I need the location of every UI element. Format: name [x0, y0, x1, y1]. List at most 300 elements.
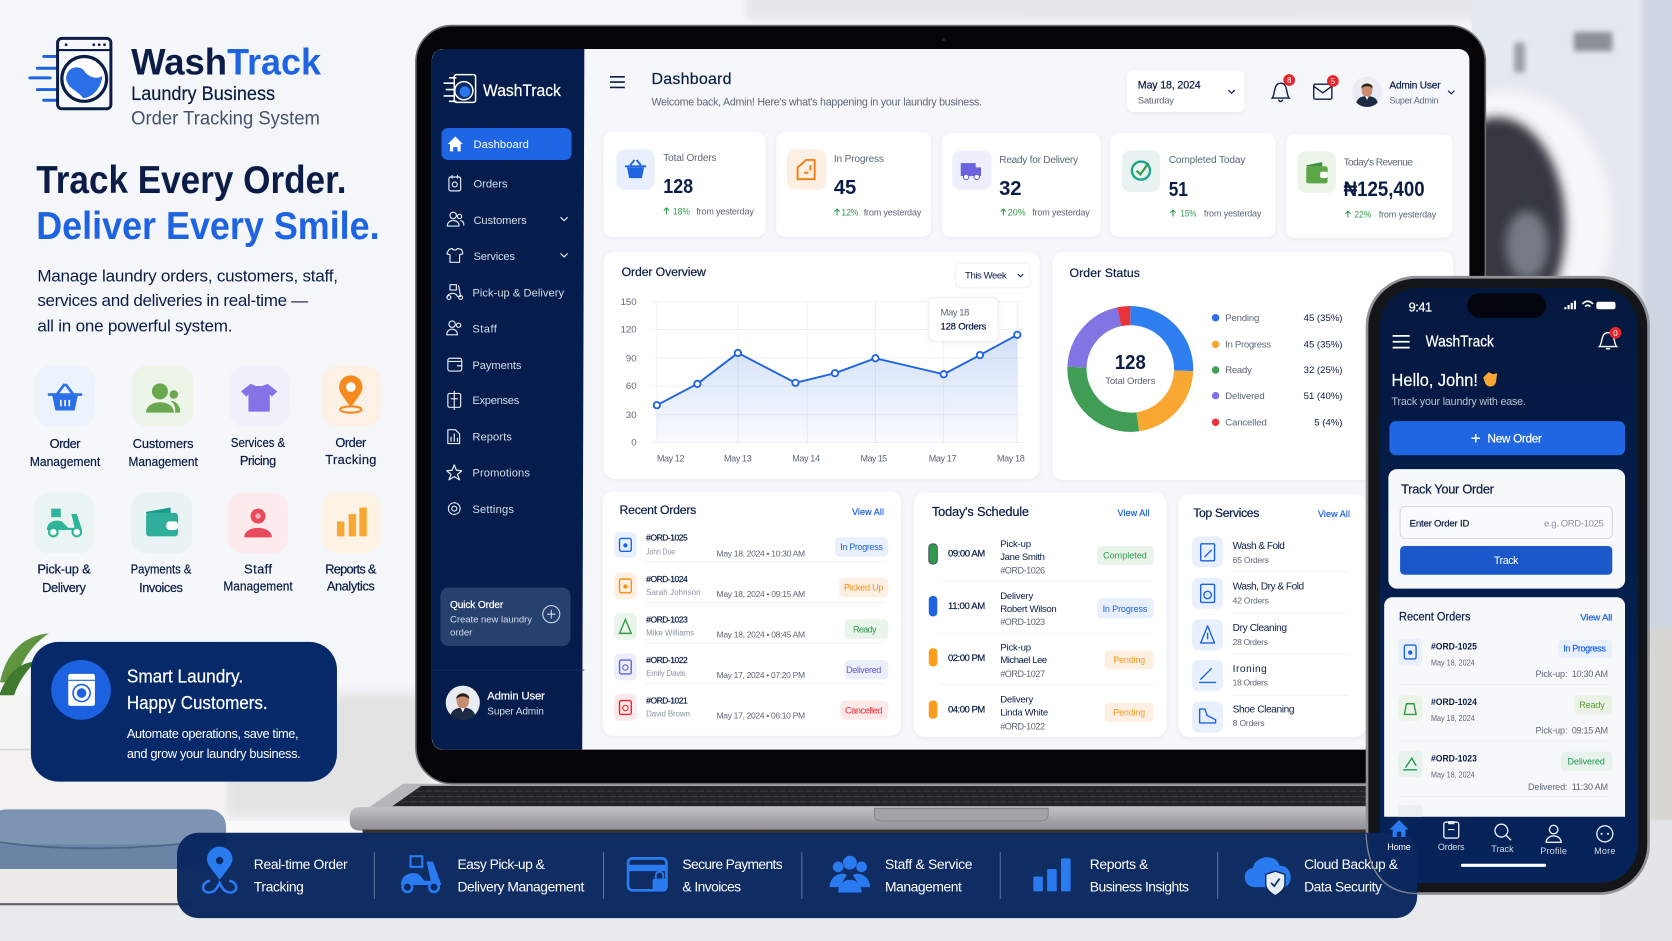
panel: order overview chart [604, 252, 1040, 479]
tooltip: May 18 [940, 308, 969, 319]
nav item: settings: Settings [472, 504, 514, 516]
phone order 1024: May 18, 2024 [1431, 713, 1475, 723]
sidebar logo [444, 75, 561, 102]
benefit: secure payments: & Invoices [682, 878, 741, 894]
y axis labels: 150 [621, 297, 637, 308]
order line [654, 332, 1020, 408]
laptop bezel [416, 26, 1485, 784]
feature: services and pricing: Pricing [240, 453, 276, 468]
track order card: Track [1494, 555, 1519, 567]
service: wash and fold [1192, 536, 1285, 567]
legend: In Progress [1225, 340, 1271, 351]
schedule row 4pm: #ORD-1022 [1000, 721, 1045, 731]
quick order card [440, 588, 570, 646]
feature: staff management [223, 493, 293, 594]
stat card: today's revenue [1286, 134, 1452, 238]
feature: reports and analytics: Reports & [325, 562, 377, 577]
feature: pick-up and delivery: Delivery [42, 580, 86, 595]
benefit: cloud backup [1245, 856, 1399, 896]
stat card: total orders: Total Orders [663, 153, 717, 164]
quick order card: Create new laundry [450, 615, 532, 626]
panel: recent orders [602, 492, 901, 736]
order row 1022 [614, 654, 888, 680]
order row 1023 [614, 613, 888, 640]
donut total: 128 [1115, 352, 1146, 374]
order row 1022: May 17, 2024 • 07:20 PM [717, 670, 805, 680]
service: wash dry and fold: Wash, Dry & Fold [1233, 582, 1304, 593]
sidebar user [446, 686, 545, 720]
phone order 1025: 10:30 AM [1572, 669, 1608, 679]
greeting [1392, 370, 1526, 408]
order row 1025: May 18, 2024 • 10:30 AM [717, 549, 805, 559]
benefit: cloud backup: Cloud Backup & [1304, 856, 1399, 872]
benefit: staff and service: Management [885, 878, 962, 894]
welcome line: Welcome back, Admin! Here's what's happening in your laundry business. [652, 97, 982, 109]
schedule row 4pm: Pending [1113, 707, 1145, 717]
order row 1025: In Progress [840, 542, 883, 552]
week dropdown [955, 263, 1030, 288]
stat card: completed today: 51 [1169, 179, 1188, 201]
callout: smart laundry: Automate operations, save time, [127, 726, 299, 741]
stat card: total orders [604, 132, 766, 237]
service: wash and fold: 65 Orders [1233, 555, 1269, 565]
nav item: reports [448, 430, 512, 444]
order row 1024: Sarah Johnson [646, 588, 701, 597]
nav item: services: Services [473, 251, 515, 263]
order row 1023: Mike Williams [646, 629, 694, 638]
service: ironing: Ironing [1233, 664, 1267, 675]
stat card: completed today: from yesterday [1204, 208, 1262, 218]
service: wash dry and fold [1192, 578, 1304, 609]
schedule row 11am: Robert Wilson [1000, 604, 1057, 615]
service: dry cleaning: Dry Cleaning [1233, 623, 1287, 634]
order row 1025 [614, 532, 888, 559]
benefit: real-time tracking [203, 847, 348, 894]
area under line [657, 335, 1017, 443]
brand tagline 1: Laundry Business [131, 84, 275, 105]
y axis labels: 0 [631, 438, 637, 449]
stat card: total orders: 18% [673, 206, 690, 216]
stat card: completed today: Completed Today [1169, 155, 1246, 166]
feature: order tracking: Tracking [325, 452, 376, 467]
order row 1021: May 17, 2024 • 06:10 PM [717, 711, 805, 721]
feature: order tracking: Order [335, 435, 367, 450]
legend: Cancelled [1225, 417, 1267, 428]
stat card: in progress [776, 132, 931, 237]
nav item: pick-up and delivery: Pick-up & Delivery [472, 287, 564, 299]
donut total: Total Orders [1105, 376, 1156, 387]
order row 1022: Emily Davis [646, 669, 686, 678]
tab: profile: Profile [1540, 846, 1567, 856]
new order button: New Order [1488, 433, 1542, 446]
nav item: orders: Orders [473, 179, 508, 191]
panel: top services [1178, 494, 1366, 737]
stat card: ready for delivery: Ready for Delivery [999, 155, 1079, 166]
stat card: ready for delivery: 32 [999, 178, 1022, 200]
sidebar user: Super Admin [487, 706, 544, 717]
donut total [1105, 352, 1156, 387]
phone recent orders [1384, 597, 1625, 832]
benefit: pick-up and delivery [401, 856, 584, 894]
phone order 1024: Pick-up: [1536, 726, 1568, 736]
order row 1022: #ORD-1022 [646, 655, 688, 665]
service: shoe cleaning: Shoe Cleaning [1233, 704, 1295, 715]
order row 1025: John Doe [646, 547, 675, 556]
schedule row 11am: #ORD-1023 [1000, 617, 1045, 627]
order row 1025: #ORD-1025 [646, 533, 688, 543]
stat card: completed today [1110, 133, 1275, 237]
nav item: customers [447, 212, 567, 227]
track order card: Track Your Order [1401, 482, 1495, 497]
feature: reports and analytics: Analytics [327, 579, 375, 594]
phone order 1023: #ORD-1023 [1431, 753, 1477, 764]
nav item: expenses [448, 391, 520, 409]
legend: 45 (35%) [1304, 313, 1343, 324]
order row 1023: May 18, 2024 • 08:45 AM [717, 630, 805, 640]
notification bell: 8 [1287, 76, 1292, 85]
benefit: secure payments [628, 856, 783, 894]
legend: 5 (4%) [1314, 417, 1343, 428]
panel: today's schedule [914, 493, 1167, 737]
nav item: dashboard [441, 128, 572, 160]
stat card: in progress: In Progress [834, 154, 884, 165]
mail icon [1314, 75, 1339, 99]
new order button [1389, 421, 1625, 455]
feature: order management [30, 366, 101, 469]
phone order 1023: 11:30 AM [1572, 782, 1608, 792]
phone order 1025: #ORD-1025 [1431, 641, 1477, 652]
date picker: May 18, 2024 [1138, 80, 1201, 92]
order row 1024: Picked Up [844, 583, 883, 593]
feature: reports and analytics [322, 493, 381, 594]
schedule row 11am: Delivery [1000, 591, 1033, 602]
feature: pick-up and delivery [34, 493, 94, 595]
status bar: 9:41 [1409, 299, 1432, 314]
mail icon: 5 [1331, 77, 1336, 86]
week dropdown: This Week [965, 270, 1007, 281]
nav item: payments [448, 358, 522, 372]
intro paragraph: services and deliveries in real-time — [37, 291, 309, 310]
tab: track [1491, 824, 1514, 854]
stat card: ready for delivery: from yesterday [1032, 207, 1090, 217]
sidebar [432, 49, 584, 750]
schedule row 2pm: Michael Lee [1000, 655, 1047, 666]
order row 1022: Delivered [846, 665, 881, 675]
feature: customers management: Customers [133, 436, 194, 451]
status bar [1409, 293, 1615, 318]
phone order 1023: Delivered [1568, 757, 1605, 767]
schedule row 4pm: 04:00 PM [948, 704, 985, 715]
x axis labels: May 17 [929, 454, 956, 464]
schedule row 11am: 11:00 AM [948, 601, 985, 612]
track order card [1388, 469, 1625, 589]
schedule row 11am [929, 591, 1154, 627]
phone app bar: WashTrack [1426, 334, 1494, 351]
phone order 1023: Delivered: [1528, 782, 1568, 792]
legend: 45 (35%) [1304, 340, 1343, 351]
nav item: payments: Payments [472, 360, 522, 372]
benefit: real-time tracking: Tracking [254, 878, 304, 894]
deck surface [368, 784, 1376, 808]
nav item: promotions: Promotions [472, 468, 530, 480]
stat card: in progress: from yesterday [864, 207, 922, 217]
schedule row 9am: Pick-up [1000, 539, 1031, 550]
bottom feature bar [177, 833, 1417, 918]
tab: profile [1540, 825, 1567, 856]
y axis labels: 60 [626, 381, 637, 392]
legend [1212, 313, 1343, 428]
brand name: Wash [131, 41, 227, 83]
service: shoe cleaning [1192, 702, 1295, 733]
feature: order tracking [322, 366, 381, 467]
phone app bar: 0 [1613, 329, 1618, 338]
feature: staff management: Staff [244, 562, 272, 577]
order row 1024: #ORD-1024 [646, 574, 688, 584]
service: ironing [1192, 660, 1268, 691]
phone [1367, 277, 1649, 894]
track order card: Enter Order ID [1410, 519, 1469, 530]
x axis labels: May 12 [657, 454, 685, 464]
plant and towels [0, 633, 226, 905]
legend: 32 (25%) [1304, 365, 1343, 376]
laptop base [350, 807, 1376, 831]
phone order 1024: 09:15 AM [1572, 726, 1608, 736]
benefit: reports and insights: Business Insights [1090, 878, 1189, 894]
y axis labels: 90 [626, 353, 637, 364]
service: wash dry and fold: 42 Orders [1233, 596, 1269, 606]
stat card: ready for delivery [942, 133, 1100, 237]
laptop screen [432, 49, 1469, 750]
benefit: real-time tracking: Real-time Order [254, 856, 348, 872]
legend: Pending [1225, 313, 1259, 324]
benefit: pick-up and delivery: Easy Pick-up & [457, 856, 546, 872]
schedule row 2pm [929, 642, 1154, 679]
schedule row 11am: In Progress [1103, 604, 1148, 614]
benefit: reports and insights: Reports & [1090, 856, 1149, 872]
phone order 1025: May 18, 2024 [1431, 657, 1475, 667]
brand name [131, 41, 321, 83]
phone order 1024: Ready [1579, 700, 1605, 710]
top services heading: Top Services [1193, 506, 1259, 520]
order row 1021 [614, 694, 888, 721]
chart heading: Order Overview [622, 265, 706, 279]
callout: smart laundry: Happy Customers. [127, 693, 268, 713]
schedule heading: Today's Schedule [932, 504, 1029, 519]
phone order 1025 [1398, 639, 1612, 679]
stat card: today's revenue: 22% [1354, 210, 1371, 220]
brand name: Track [227, 41, 321, 83]
tooltip: 128 Orders [940, 321, 987, 332]
phone recent orders: Recent Orders [1399, 610, 1470, 624]
brand tagline 2: Order Tracking System [131, 109, 320, 130]
sidebar user: Admin User [487, 690, 545, 702]
schedule row 2pm: Pick-up [1000, 642, 1031, 653]
benefit: staff and service: Staff & Service [885, 856, 973, 872]
panel: order status [1052, 252, 1453, 480]
schedule row 4pm: Delivery [1000, 695, 1033, 706]
stat card: today's revenue: ₦125,400 [1344, 178, 1425, 201]
order row 1024: May 18, 2024 • 09:15 AM [717, 589, 805, 599]
feature: order management: Management [30, 454, 101, 469]
admin user: Super Admin [1389, 95, 1438, 105]
legend: 51 (40%) [1304, 391, 1343, 402]
order row 1023: #ORD-1023 [646, 615, 688, 625]
logo icon [30, 38, 111, 109]
phone order 1025: In Progress [1563, 644, 1606, 654]
feature: services and pricing [229, 366, 289, 468]
callout: smart laundry [31, 642, 337, 782]
order row 1024 [614, 573, 888, 599]
nav item: dashboard: Dashboard [473, 139, 529, 151]
schedule row 4pm [929, 695, 1154, 731]
x axis labels: May 14 [792, 454, 820, 464]
tab: more [1594, 826, 1615, 856]
nav item: reports: Reports [472, 431, 512, 443]
headline: Deliver Every Smile. [36, 205, 380, 248]
feature: staff management: Management [223, 579, 293, 594]
stat card: in progress: 45 [834, 177, 856, 199]
nav item: services [447, 248, 567, 263]
tab: more: More [1594, 846, 1615, 856]
tooltip [929, 297, 998, 341]
schedule row 9am: Jane Smith [1000, 552, 1045, 563]
schedule row 2pm: Pending [1113, 655, 1145, 665]
tab: home [1387, 820, 1411, 852]
x axis labels: May 18 [997, 454, 1025, 464]
tab: track: Track [1491, 844, 1514, 854]
feature: services and pricing: Services & [231, 435, 286, 450]
feature: payments and invoices: Payments & [131, 562, 192, 577]
nav item: customers: Customers [473, 215, 527, 227]
stat card: today's revenue: from yesterday [1379, 210, 1437, 220]
quick order card: Quick Order [450, 600, 504, 611]
menu icon [610, 77, 625, 87]
order row 1021: David Brown [646, 710, 690, 719]
phone order 1024 [1398, 695, 1612, 736]
phone tab bar [1387, 820, 1615, 867]
stat card: today's revenue: Today's Revenue [1344, 157, 1413, 168]
phone app bar [1393, 327, 1621, 351]
recent orders heading: Recent Orders [620, 503, 696, 517]
stat card: total orders: from yesterday [696, 206, 754, 216]
nav item: settings [448, 503, 514, 516]
service: shoe cleaning: 8 Orders [1233, 718, 1265, 728]
schedule row 2pm: #ORD-1027 [1000, 669, 1045, 679]
feature: order management: Order [50, 436, 81, 451]
benefit: reports and insights [1033, 856, 1189, 894]
date picker [1127, 70, 1244, 112]
donut chart [1077, 316, 1184, 422]
benefit: staff and service [830, 856, 973, 894]
admin user [1352, 77, 1454, 107]
phone order 1025: Pick-up: [1536, 669, 1568, 679]
phone corner outline [1366, 834, 1418, 894]
recent orders view all: View All [852, 507, 884, 517]
phone screen [1380, 288, 1638, 883]
headline [36, 159, 380, 248]
intro paragraph [37, 267, 338, 336]
callout: smart laundry: Smart Laundry. [127, 666, 243, 686]
schedule row 4pm: Linda White [1000, 707, 1048, 718]
intro paragraph: Manage laundry orders, customers, staff, [37, 267, 338, 286]
stat card: total orders: 128 [663, 176, 693, 198]
track order card: e.g. ORD-1025 [1544, 519, 1604, 530]
schedule row 9am [929, 539, 1154, 576]
nav item: staff: Staff [472, 324, 498, 336]
legend: Ready [1225, 365, 1252, 376]
service: dry cleaning [1192, 620, 1287, 650]
intro paragraph: all in one powerful system. [37, 317, 232, 336]
greeting: Hello, John! [1392, 370, 1478, 390]
callout: smart laundry: and grow your laundry business. [127, 746, 301, 761]
phone order 1024: #ORD-1024 [1431, 697, 1477, 708]
phone order 1023: May 18, 2024 [1431, 769, 1475, 779]
y axis labels: 120 [621, 325, 637, 336]
phone recent orders: View All [1580, 613, 1612, 624]
nav item: pick-up and delivery [447, 285, 564, 299]
header [610, 70, 1454, 112]
schedule row 9am: Completed [1103, 551, 1147, 561]
top services view all: View All [1318, 509, 1350, 519]
order row 1021: Cancelled [845, 705, 882, 715]
nav item: orders [449, 175, 508, 191]
schedule row 9am: 09:00 AM [948, 549, 985, 560]
page title: Dashboard [652, 71, 732, 88]
x axis labels: May 13 [724, 454, 752, 464]
feature: customers management: Management [128, 454, 198, 469]
schedule row 2pm: 02:00 PM [948, 653, 985, 664]
sidebar logo: WashTrack [483, 81, 561, 100]
home indicator [1461, 864, 1546, 867]
x axis labels [657, 454, 1025, 464]
feature: payments and invoices [131, 493, 192, 595]
y axis labels: 30 [626, 410, 637, 421]
date picker: Saturday [1138, 95, 1174, 106]
tab: orders [1438, 821, 1465, 852]
benefit: cloud backup: Data Security [1304, 878, 1382, 894]
keyboard deck [392, 786, 1376, 806]
legend: Delivered [1225, 391, 1265, 402]
nav item: staff [447, 321, 498, 336]
callout washer icon [51, 660, 111, 720]
stat card: ready for delivery: 20% [1008, 207, 1026, 217]
nav item: expenses: Expenses [472, 395, 520, 407]
order row 1023: Ready [853, 624, 877, 634]
nav item: promotions [447, 465, 530, 480]
x axis labels: May 15 [861, 454, 887, 464]
quick order card: order [450, 628, 473, 639]
admin user: Admin User [1389, 81, 1441, 92]
benefit: pick-up and delivery: Delivery Management [457, 878, 584, 894]
faded next row [1398, 805, 1422, 817]
brand logo [30, 38, 321, 130]
schedule view all: View All [1118, 508, 1150, 518]
headline: Track Every Order. [36, 159, 347, 202]
phone frame [1367, 277, 1649, 894]
stat card: in progress: 12% [841, 207, 858, 217]
greeting: Track your laundry with ease. [1392, 396, 1526, 408]
stat card: completed today: 15% [1180, 208, 1196, 218]
feature: customers management [128, 366, 198, 469]
tab: orders: Orders [1438, 842, 1465, 852]
service: dry cleaning: 28 Orders [1233, 637, 1268, 647]
feature: pick-up and delivery: Pick-up & [37, 562, 91, 577]
phone order 1023 [1398, 751, 1612, 792]
status heading: Order Status [1070, 266, 1140, 280]
y axis labels [621, 297, 637, 449]
laptop [350, 26, 1485, 834]
schedule row 9am: #ORD-1026 [1000, 566, 1045, 576]
